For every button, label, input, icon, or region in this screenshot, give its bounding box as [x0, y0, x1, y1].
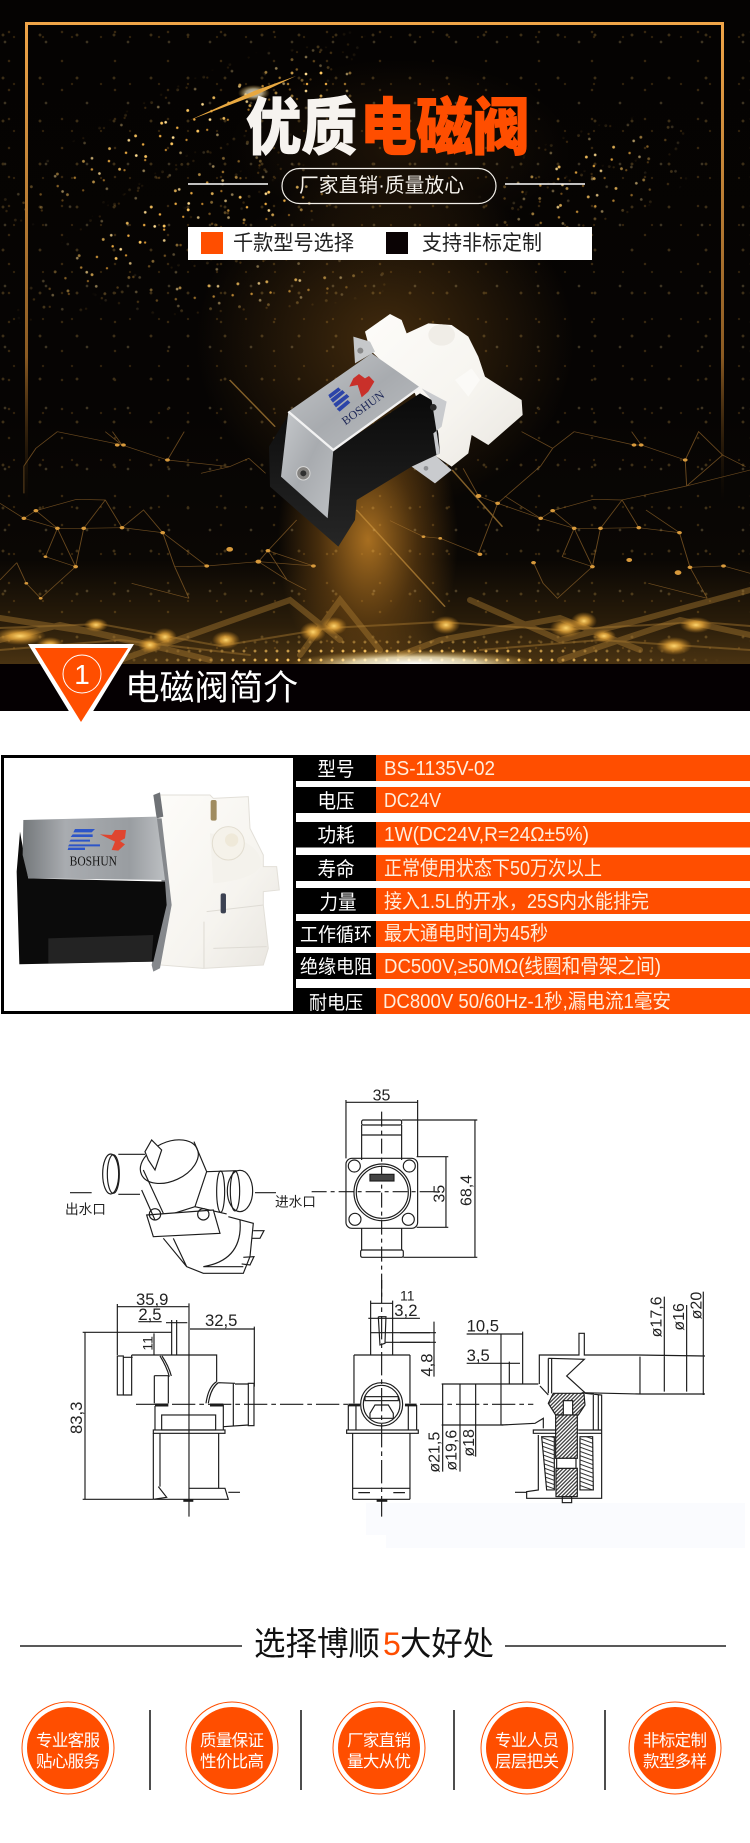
section badge: [28, 644, 134, 731]
technical drawing: isometric view and top view: 出水口: [65, 1202, 106, 1217]
benefit: customization: 款型多样: [643, 1752, 707, 1771]
golden light streaks and glitter at base of hero: [0, 590, 750, 678]
benefit: inspection: 层层把关: [495, 1752, 559, 1771]
feature band: 千款型号选择: [233, 232, 354, 255]
spec row: power: [296, 822, 750, 848]
technical drawing: section view: ø21,5: [426, 1432, 443, 1473]
spec row: life: 正常使用状态下50万次以上: [384, 857, 602, 880]
benefit: customization: 非标定制: [643, 1731, 707, 1750]
title: 优质: [246, 94, 357, 163]
front elevation: 11: [400, 1288, 415, 1304]
spec row: force: 接入1.5L的开水，25S内水能排完: [384, 890, 649, 913]
benefit: service: 贴心服务: [36, 1752, 100, 1771]
technical drawing: section view: ø19,6: [444, 1430, 461, 1471]
spec row: withstand voltage: [296, 988, 750, 1014]
black section band: [0, 664, 750, 711]
feature band: [188, 227, 592, 260]
product photo panel: [1, 755, 296, 1014]
spec table: [296, 755, 750, 1014]
off-white scan patch: [366, 1503, 745, 1548]
benefit: quality: 质量保证: [200, 1731, 264, 1750]
spec row: withstand voltage: 耐电压: [309, 992, 363, 1014]
benefits heading: 大好处: [400, 1625, 494, 1662]
benefits heading: [20, 1625, 726, 1662]
section heading: 电磁阀简介: [125, 669, 298, 708]
feature band: 支持非标定制: [422, 232, 542, 255]
subtitle pill: 厂家直销·质量放心: [299, 174, 464, 197]
front elevation: 3,2: [394, 1301, 417, 1320]
spec row: power: 1W(DC24V,R=24Ω±5%): [384, 824, 589, 846]
side elevation: [67, 1290, 350, 1517]
spec row: insulation: [296, 953, 750, 979]
technical drawing: section view: ø18: [461, 1429, 478, 1457]
top view: 68,4: [459, 1175, 476, 1206]
side elevation: 35,9: [136, 1290, 168, 1309]
title flare: [190, 76, 296, 120]
hero background with gold dust: [0, 0, 750, 664]
spec row: insulation: DC500V,≥50MΩ(线圈和骨架之间): [384, 955, 661, 978]
hero valve photo: [269, 314, 523, 547]
spec row: model: [296, 755, 750, 781]
technical drawing: isometric view and top view: 进水口: [275, 1195, 316, 1210]
spec row: life: [296, 855, 750, 881]
benefit: factory direct: [333, 1702, 425, 1794]
benefit: factory direct: 量大从优: [347, 1752, 411, 1771]
icon: orange square: [201, 232, 223, 254]
product photo panel: BOSHUN: [70, 854, 117, 869]
front elevation: [347, 1280, 437, 1517]
technical drawing: isometric view and top view: [65, 1088, 477, 1300]
technical drawing: section view: 3,5: [467, 1346, 490, 1365]
spec row: withstand voltage: DC800V 50/60Hz-1秒,漏电流1毫安: [383, 990, 671, 1013]
front elevation: 4,8: [418, 1354, 437, 1377]
network nodes: [22, 443, 726, 600]
spec row: voltage: [296, 787, 750, 813]
technical drawing: side and front elevation: [67, 1280, 437, 1517]
top view: [312, 1088, 477, 1300]
benefit: inspection: 专业人员: [495, 1731, 559, 1750]
benefit: quality: [186, 1702, 278, 1794]
hero valve photo: BOSHUN: [339, 387, 387, 428]
benefit: service: [22, 1702, 114, 1794]
side elevation: 11: [140, 1336, 156, 1351]
benefits heading: 选择博顺: [254, 1625, 380, 1662]
side elevation: 2,5: [138, 1305, 161, 1324]
technical drawing: section view: [400, 1292, 706, 1503]
benefit: service: 专业客服: [36, 1731, 100, 1750]
spec row: model: BS-1135V-02: [384, 758, 495, 780]
section badge: 1: [74, 659, 90, 690]
spec row: life: 寿命: [318, 858, 354, 881]
title: 电磁阀: [360, 94, 529, 163]
spec row: duty cycle: [296, 921, 750, 947]
spec row: model: 型号: [318, 758, 354, 781]
network lines background: [0, 380, 750, 607]
side elevation: 32,5: [205, 1311, 237, 1330]
benefit: quality: 性价比高: [200, 1752, 264, 1771]
side elevation: 83,3: [67, 1402, 86, 1434]
spec row: voltage: DC24V: [384, 790, 442, 812]
title: [246, 94, 529, 163]
technical drawing: section view: ø20: [689, 1292, 706, 1319]
benefit: customization: [629, 1702, 721, 1794]
spec row: duty cycle: 最大通电时间为45秒: [384, 922, 548, 945]
benefit: inspection: [481, 1702, 573, 1794]
top view: 35: [432, 1185, 449, 1203]
spec row: duty cycle: 工作循环: [300, 924, 372, 946]
iso valve: [103, 1131, 264, 1273]
labels: [70, 1191, 92, 1194]
top view: 35: [373, 1088, 391, 1105]
technical drawing: section view: ø17,6: [649, 1296, 666, 1337]
gold frame: [25, 22, 724, 502]
benefits heading: 5: [383, 1626, 401, 1662]
spec row: force: [296, 888, 750, 914]
spec row: power: 功耗: [318, 824, 354, 847]
technical drawing: section view: ø16: [671, 1303, 688, 1331]
spec row: voltage: 电压: [318, 790, 354, 813]
subtitle pill: [188, 168, 585, 204]
spec row: force: 力量: [320, 891, 356, 914]
technical drawing: section view: 10,5: [467, 1317, 499, 1336]
spec row: insulation: 绝缘电阻: [300, 956, 372, 978]
benefit: factory direct: 厂家直销: [347, 1731, 411, 1750]
